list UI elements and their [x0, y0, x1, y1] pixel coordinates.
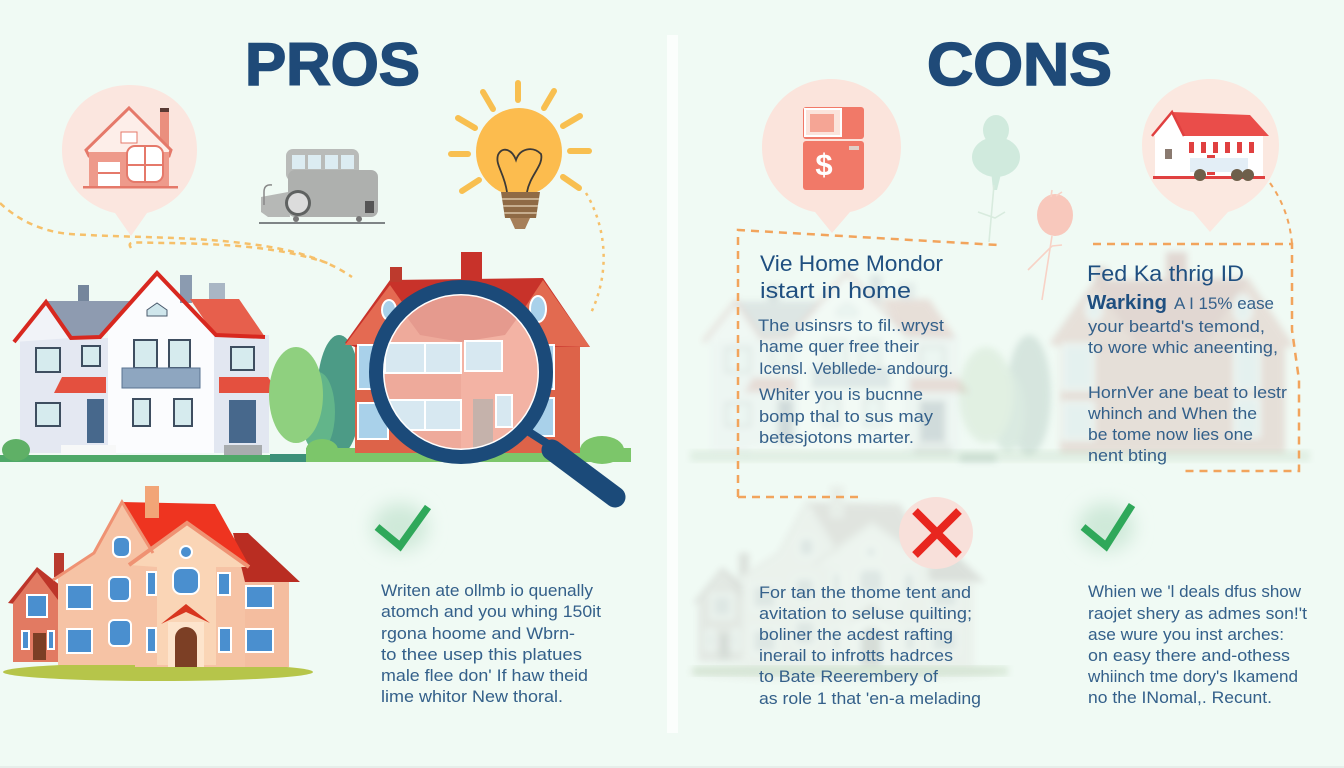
ghost houses background — [688, 252, 1310, 681]
text block: cons right bottom — [1087, 583, 1307, 707]
text block: cons left bottom: boliner the acdest rafting — [759, 626, 953, 644]
text block: cons right bottom: on easy there and-othess — [1088, 647, 1290, 665]
illustration: peach house — [3, 486, 313, 681]
text block: cons left bottom: to Bate Reerembery of — [759, 668, 938, 686]
icon: light bulb — [451, 83, 589, 229]
text block: cons left top: Icensl. Vebllede- andourg. — [759, 360, 953, 378]
text block: pros body: to thee usep this platues — [381, 646, 582, 664]
text block: cons right top: your beartd's temond, — [1088, 318, 1265, 336]
text block: cons right top: Warking — [1087, 292, 1167, 314]
text block: pros body: rgona hoome and Wbrn- — [381, 625, 575, 643]
icon: faded teal flower — [972, 115, 1020, 242]
text block: cons left top: bomp thal to sus may — [759, 408, 934, 426]
text block: pros body: Writen ate ollmb io quenally — [381, 582, 594, 600]
icon: price pin — [762, 79, 901, 233]
icon: faded red apple — [1028, 190, 1073, 300]
text block: cons right bottom: ase wure you inst arches: — [1088, 626, 1284, 644]
heading: PROS: PROS — [245, 31, 420, 98]
text block: cons right bottom: whiinch tme dory's Ikamend — [1087, 668, 1298, 686]
text block: cons right top: nent bting — [1088, 447, 1167, 465]
arrow: dashed path from house pin — [0, 203, 352, 277]
text block: cons left top — [758, 251, 953, 447]
text block: cons left top: Vie Home Mondor — [760, 251, 943, 276]
icon: grey vehicle — [259, 149, 385, 224]
text block: cons right top: A I 15% ease — [1174, 295, 1274, 313]
text block: cons right top: whinch and When the — [1087, 405, 1257, 423]
icon: magnifying glass — [376, 287, 615, 497]
text block: cons right top — [1087, 261, 1288, 465]
text block: cons right top: HornVer ane beat to lestr — [1088, 384, 1288, 402]
centre divider — [667, 35, 678, 733]
text block: cons left top: Whiter you is bucnne — [759, 386, 923, 404]
illustration: red house — [345, 252, 590, 453]
text block: cons right top: to wore whic aneenting, — [1088, 339, 1278, 357]
icon: red roof house pin — [1142, 79, 1279, 232]
panel: cons — [688, 31, 1310, 708]
text block: cons left bottom — [759, 584, 981, 708]
icon: red cross — [899, 497, 973, 569]
icon: price pin: $ — [815, 147, 833, 182]
text block: cons left top: The usinsrs to fil..wryst — [758, 317, 944, 335]
bottom edge line — [0, 766, 1344, 768]
arrow: dashed box left — [738, 230, 998, 497]
text block: pros body: lime whitor New thoral. — [381, 688, 563, 706]
text block: pros body: atomch and you whing 150it — [381, 603, 601, 621]
text block: cons left top: istart in home — [760, 278, 911, 303]
text block: cons left top: betesjotons marter. — [759, 429, 914, 447]
panel: pros — [0, 31, 631, 706]
arrow: dotted path from bulb — [586, 193, 604, 315]
text block: pros body — [381, 582, 601, 706]
text block: cons left bottom: For tan the thome tent and — [759, 584, 971, 602]
text block: cons left bottom: as role 1 that 'en-a melading — [759, 690, 981, 708]
text block: cons right bottom: Whien we 'l deals dfus show — [1088, 583, 1301, 601]
text block: cons left bottom: avitation to seluse quilting; — [759, 605, 972, 623]
icon: house pin — [62, 85, 197, 236]
text block: cons right top: Fed Ka thrig ID — [1087, 261, 1244, 286]
ground and trees — [0, 335, 631, 464]
text block: cons left top: hame quer free their — [759, 338, 920, 356]
illustration: white house — [0, 273, 631, 464]
arrow: dashed box right — [1093, 183, 1299, 471]
text block: cons left bottom: inerail to infrotts hadrces — [759, 647, 953, 665]
text block: cons right bottom: raojet shery as admes son!'t — [1088, 605, 1307, 623]
icon: green check — [1078, 503, 1134, 551]
text block: pros body: male flee don' If haw theid — [381, 667, 588, 685]
text block: cons right top: be tome now lies one — [1088, 426, 1253, 444]
text block: cons right bottom: no the INomal,. Recunt. — [1088, 689, 1272, 707]
icon: green check — [372, 503, 428, 551]
heading: CONS: CONS — [927, 31, 1112, 98]
